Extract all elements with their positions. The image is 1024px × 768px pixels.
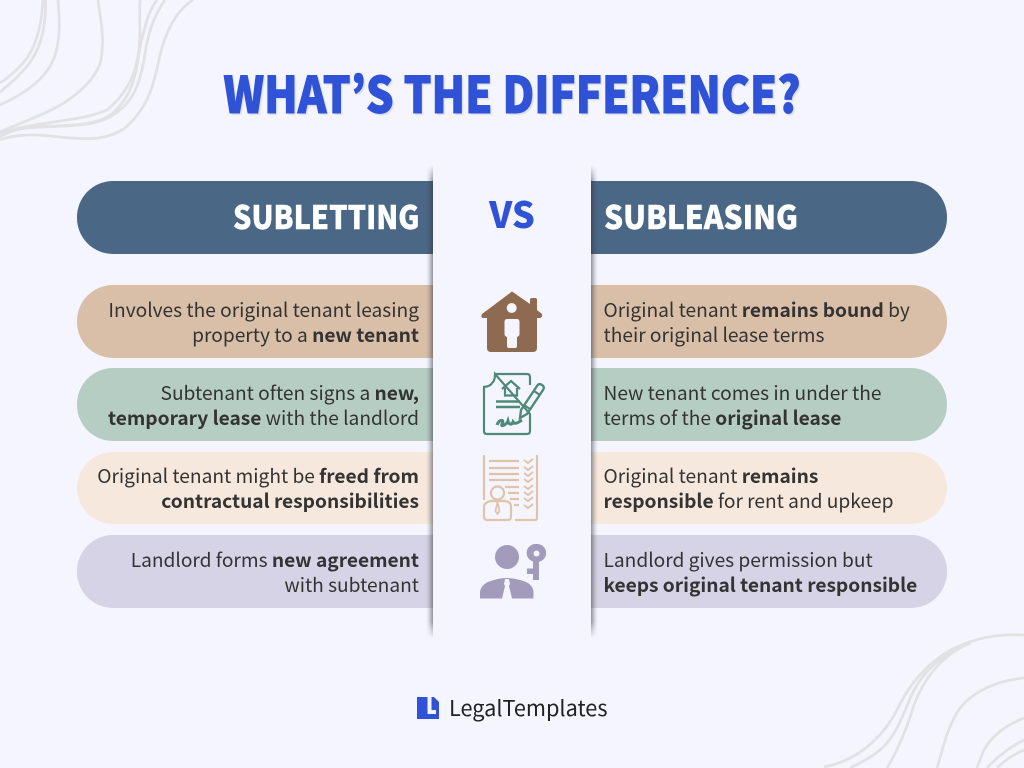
icon: document with person xyxy=(482,455,538,522)
header: subletting xyxy=(77,181,433,254)
row 1 right xyxy=(591,285,947,358)
row 2 left xyxy=(77,368,433,441)
logo: LegalTemplates xyxy=(417,692,607,723)
row 4 left: Landlord forms new agreement xyxy=(131,545,419,573)
row 3 right xyxy=(591,452,947,524)
row 1 right: Original tenant remains bound by xyxy=(604,295,910,323)
row 4 right: keeps original tenant responsible xyxy=(604,570,917,598)
row 2 right xyxy=(591,368,947,441)
decorative curves: bottom right xyxy=(824,634,1024,768)
row 1 right: their original lease terms xyxy=(604,320,824,348)
icon: person with key xyxy=(480,544,546,598)
row 3 right: responsible for rent and upkeep xyxy=(604,486,894,514)
row 4 right: Landlord gives permission but xyxy=(604,545,873,573)
row 2 left: Subtenant often signs a new, xyxy=(161,378,419,406)
header: subleasing xyxy=(591,181,947,254)
logo wordmark: LegalTemplates xyxy=(449,692,607,723)
icon: house with person xyxy=(481,292,542,352)
row 1 left xyxy=(77,285,433,358)
row 4 right xyxy=(591,535,947,608)
icon: signed contract xyxy=(482,371,545,436)
center column xyxy=(433,165,591,638)
row 3 left xyxy=(77,452,433,524)
row 3 left: Original tenant might be freed from xyxy=(97,461,419,489)
title: WHAT’S THE DIFFERENCE? xyxy=(223,56,801,128)
vs label: VS xyxy=(489,187,535,239)
row 4 left: with subtenant xyxy=(284,570,419,598)
row 2 right: terms of the original lease xyxy=(604,403,841,431)
row 1 left: property to a new tenant xyxy=(192,320,419,348)
row 4 left xyxy=(77,535,433,608)
decorative curves: top left xyxy=(0,0,194,142)
header: subleasing: SUBLEASING xyxy=(604,193,798,239)
header: subletting: SUBLETTING xyxy=(233,193,419,239)
row 2 left: temporary lease with the landlord xyxy=(108,403,419,431)
row 3 left: contractual responsibilities xyxy=(161,486,419,514)
row 2 right: New tenant comes in under the xyxy=(604,378,881,406)
row 3 right: Original tenant remains xyxy=(604,461,818,489)
logo mark xyxy=(417,697,439,719)
row 1 left: Involves the original tenant leasing xyxy=(108,295,419,323)
